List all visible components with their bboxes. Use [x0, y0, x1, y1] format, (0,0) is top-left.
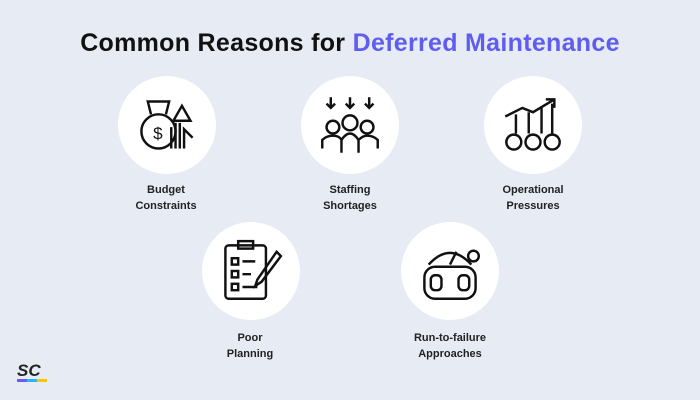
- panel: staffing: [301, 76, 399, 174]
- panel: budget: $: [153, 124, 163, 143]
- label: operational: Operational: [502, 184, 564, 196]
- label: budget: [135, 184, 197, 212]
- label: budget: Budget: [147, 184, 185, 196]
- label: staffing: Staffing: [330, 184, 370, 196]
- label: staffing: Shortages: [323, 200, 377, 212]
- label: planning: Poor: [237, 332, 263, 344]
- label: run-to-failure: Approaches: [418, 348, 482, 360]
- panel: budget: [118, 76, 216, 174]
- label: planning: [227, 332, 273, 360]
- logo: SC: [17, 361, 41, 380]
- label: operational: Pressures: [506, 200, 560, 212]
- panel: run-to-failure: [401, 222, 499, 320]
- label: planning: Planning: [227, 348, 273, 360]
- label: operational: [502, 184, 564, 212]
- label: run-to-failure: Run-to-failure: [414, 332, 486, 344]
- label: budget: Constraints: [135, 200, 197, 212]
- label: staffing: [323, 184, 377, 212]
- label: run-to-failure: [414, 332, 486, 360]
- title: Common Reasons for Deferred Maintenance: [80, 29, 620, 57]
- panel: planning: [202, 222, 300, 320]
- panel: operational: [484, 76, 582, 174]
